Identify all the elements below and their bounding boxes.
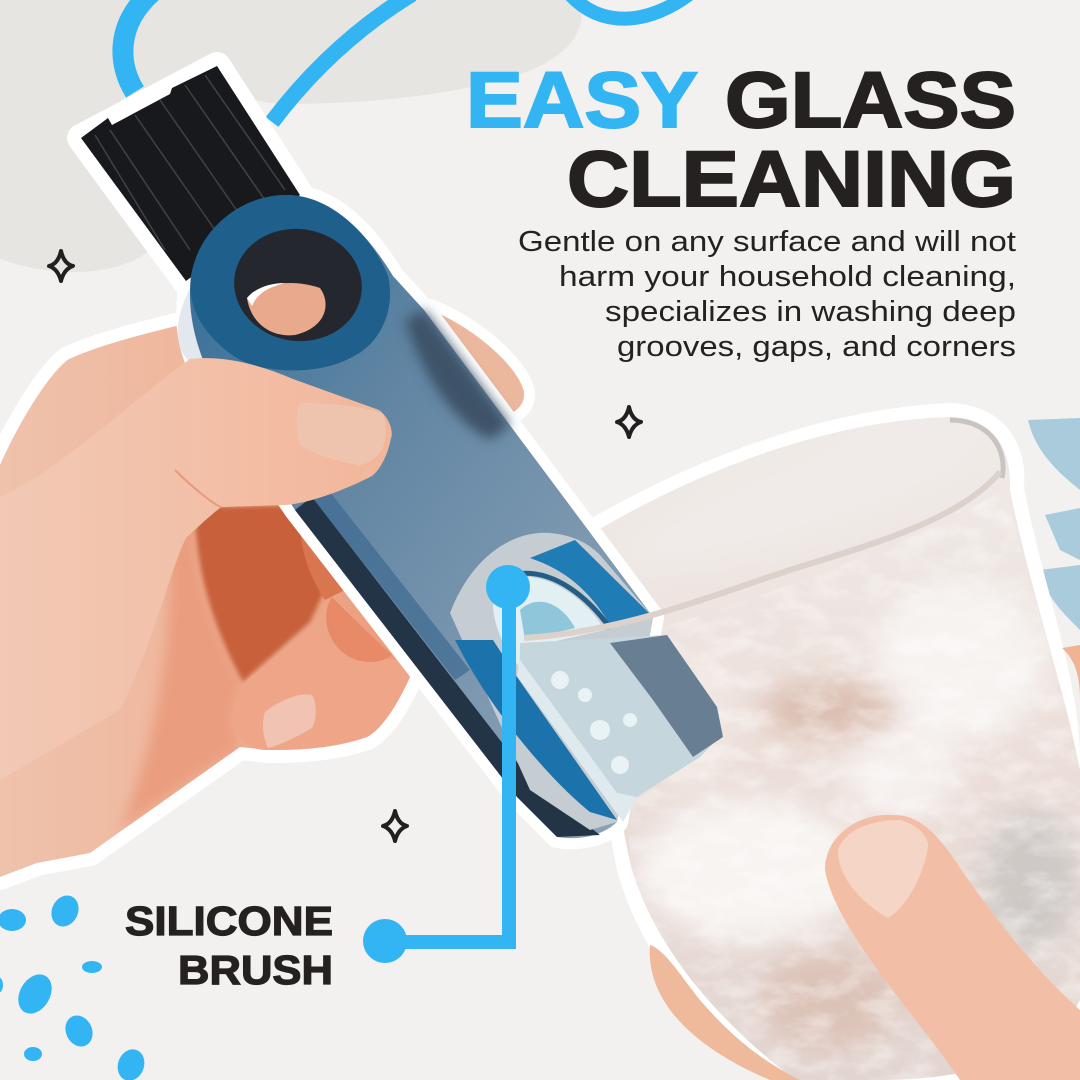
lower window halo xyxy=(450,533,653,830)
callout label: BRUSH xyxy=(178,947,333,993)
callout connector xyxy=(363,565,530,963)
background blobs xyxy=(0,0,582,272)
silicone band xyxy=(517,650,637,822)
dark edge strip xyxy=(295,497,600,837)
frosted glass patches xyxy=(634,582,1080,1055)
bristle shadow through glass xyxy=(610,635,723,757)
blue dots decoration xyxy=(0,891,149,1080)
lower finger xyxy=(233,630,410,750)
palm skin xyxy=(0,326,410,877)
sparkle icon 1 xyxy=(49,251,73,281)
glass rim edge xyxy=(524,472,1000,638)
description text xyxy=(518,226,1016,363)
thumbnail xyxy=(297,403,386,465)
finger hole xyxy=(227,221,369,349)
sparkle icon 2 xyxy=(617,407,641,437)
description text: Gentle on any surface and will not xyxy=(518,226,1016,258)
description text: grooves, gaps, and corners xyxy=(617,331,1016,363)
palm side crease xyxy=(300,505,345,600)
frost texture xyxy=(630,500,1080,1080)
leaf decoration xyxy=(1028,418,1080,630)
inner silicone xyxy=(520,602,575,640)
glass photo xyxy=(585,400,1080,1080)
right edge finger xyxy=(1062,645,1080,700)
title: CLEANING xyxy=(567,134,1016,223)
callout label: SILICONE xyxy=(125,898,333,944)
hand white outline xyxy=(0,326,410,877)
back finger xyxy=(430,310,524,417)
left hand palm xyxy=(0,326,410,877)
brush tool xyxy=(178,195,723,838)
window white ring xyxy=(493,577,605,670)
thumb of left hand xyxy=(0,358,392,780)
glass cup xyxy=(598,417,1080,1080)
lower fingernail xyxy=(263,694,316,748)
callout label xyxy=(125,898,333,993)
palm mid tone xyxy=(120,507,243,830)
hole highlight xyxy=(247,283,285,306)
title xyxy=(466,55,1016,223)
upper ring xyxy=(190,195,390,370)
title: EASY xyxy=(466,55,698,144)
upper blue stripe xyxy=(530,540,653,628)
window dark rim xyxy=(516,573,610,628)
glass white outline xyxy=(585,403,1080,1080)
white side plate xyxy=(178,285,240,375)
description text: harm your household cleaning, xyxy=(559,261,1016,293)
brush white outline xyxy=(187,195,653,838)
lower blue stripe xyxy=(455,640,617,820)
palm fold shadow xyxy=(195,505,325,682)
title: GLASS xyxy=(725,55,1016,144)
description text: specializes in washing deep xyxy=(605,296,1016,328)
right thumb xyxy=(825,815,1080,1080)
lower finger xyxy=(650,945,800,1080)
brush body xyxy=(190,195,653,838)
knuckle crease xyxy=(175,470,221,507)
silicone bristles xyxy=(520,635,723,797)
right thumbnail xyxy=(838,820,928,918)
decorative blue line xyxy=(123,0,692,122)
edge texture xyxy=(312,487,470,680)
middle fingertip xyxy=(326,597,392,662)
dark translucent band xyxy=(405,310,510,440)
sparkle icon 3 xyxy=(383,811,407,841)
bristle speckle xyxy=(551,671,637,774)
glass rim inner xyxy=(950,420,1003,478)
bristles xyxy=(81,66,300,281)
hole view of skin xyxy=(247,283,326,335)
right hand xyxy=(650,645,1080,1080)
